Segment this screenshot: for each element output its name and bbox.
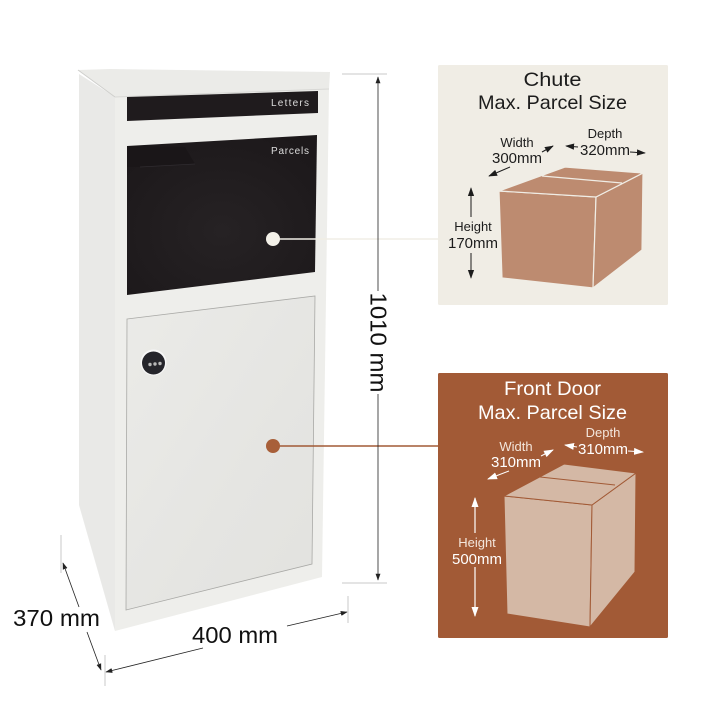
letters label: Letters xyxy=(271,98,309,109)
dimension: depth 370 mm: 370 mm xyxy=(13,605,100,631)
front door depth label xyxy=(565,425,643,458)
chute heading: Chute xyxy=(524,69,582,91)
dimension: width 400 mm xyxy=(106,596,348,672)
mailbox cabinet xyxy=(78,69,330,631)
callout: front door connector xyxy=(266,439,438,453)
front door width label xyxy=(488,439,553,479)
chute width label: Width xyxy=(500,135,534,150)
parcels label: Parcels xyxy=(271,146,309,157)
dimension: depth 370 mm xyxy=(13,535,105,686)
chute width label: 300mm xyxy=(492,151,542,167)
panel: front door max parcel size: Max. Parcel Size xyxy=(478,402,627,424)
chute depth label xyxy=(566,126,645,159)
front door height label: 500mm xyxy=(452,552,502,568)
chute parcel box xyxy=(499,167,643,288)
cabinet side panel xyxy=(79,74,115,631)
front door height label xyxy=(452,498,502,616)
chute height label: 170mm xyxy=(448,236,498,252)
panel: chute max parcel size xyxy=(438,65,668,305)
dimension: width 400 mm: 400 mm xyxy=(192,622,278,648)
front door xyxy=(126,296,315,610)
panel: front door max parcel size xyxy=(438,373,668,638)
panel: chute max parcel size: Max. Parcel Size xyxy=(478,92,627,114)
front door parcel box xyxy=(504,464,636,627)
front door depth label: Depth xyxy=(586,425,620,440)
combination lock xyxy=(140,350,166,376)
cabinet lid xyxy=(78,69,330,97)
front door width label: Width xyxy=(499,439,533,454)
chute height label xyxy=(448,188,498,278)
front door depth label: 310mm xyxy=(578,442,628,458)
chute height label: Height xyxy=(454,219,492,234)
chute width label xyxy=(489,135,553,176)
parcels chute xyxy=(127,135,317,295)
cabinet front frame xyxy=(115,89,329,631)
front door height label: Height xyxy=(458,535,496,550)
front door heading: Front Door xyxy=(504,378,602,400)
letters slot xyxy=(127,91,318,121)
chute depth label: Depth xyxy=(588,126,622,141)
dimension: height 1010 mm: 1010 mm xyxy=(366,292,392,392)
front door width label: 310mm xyxy=(491,455,541,471)
chute depth label: 320mm xyxy=(580,143,630,159)
callout: chute connector xyxy=(266,232,438,246)
